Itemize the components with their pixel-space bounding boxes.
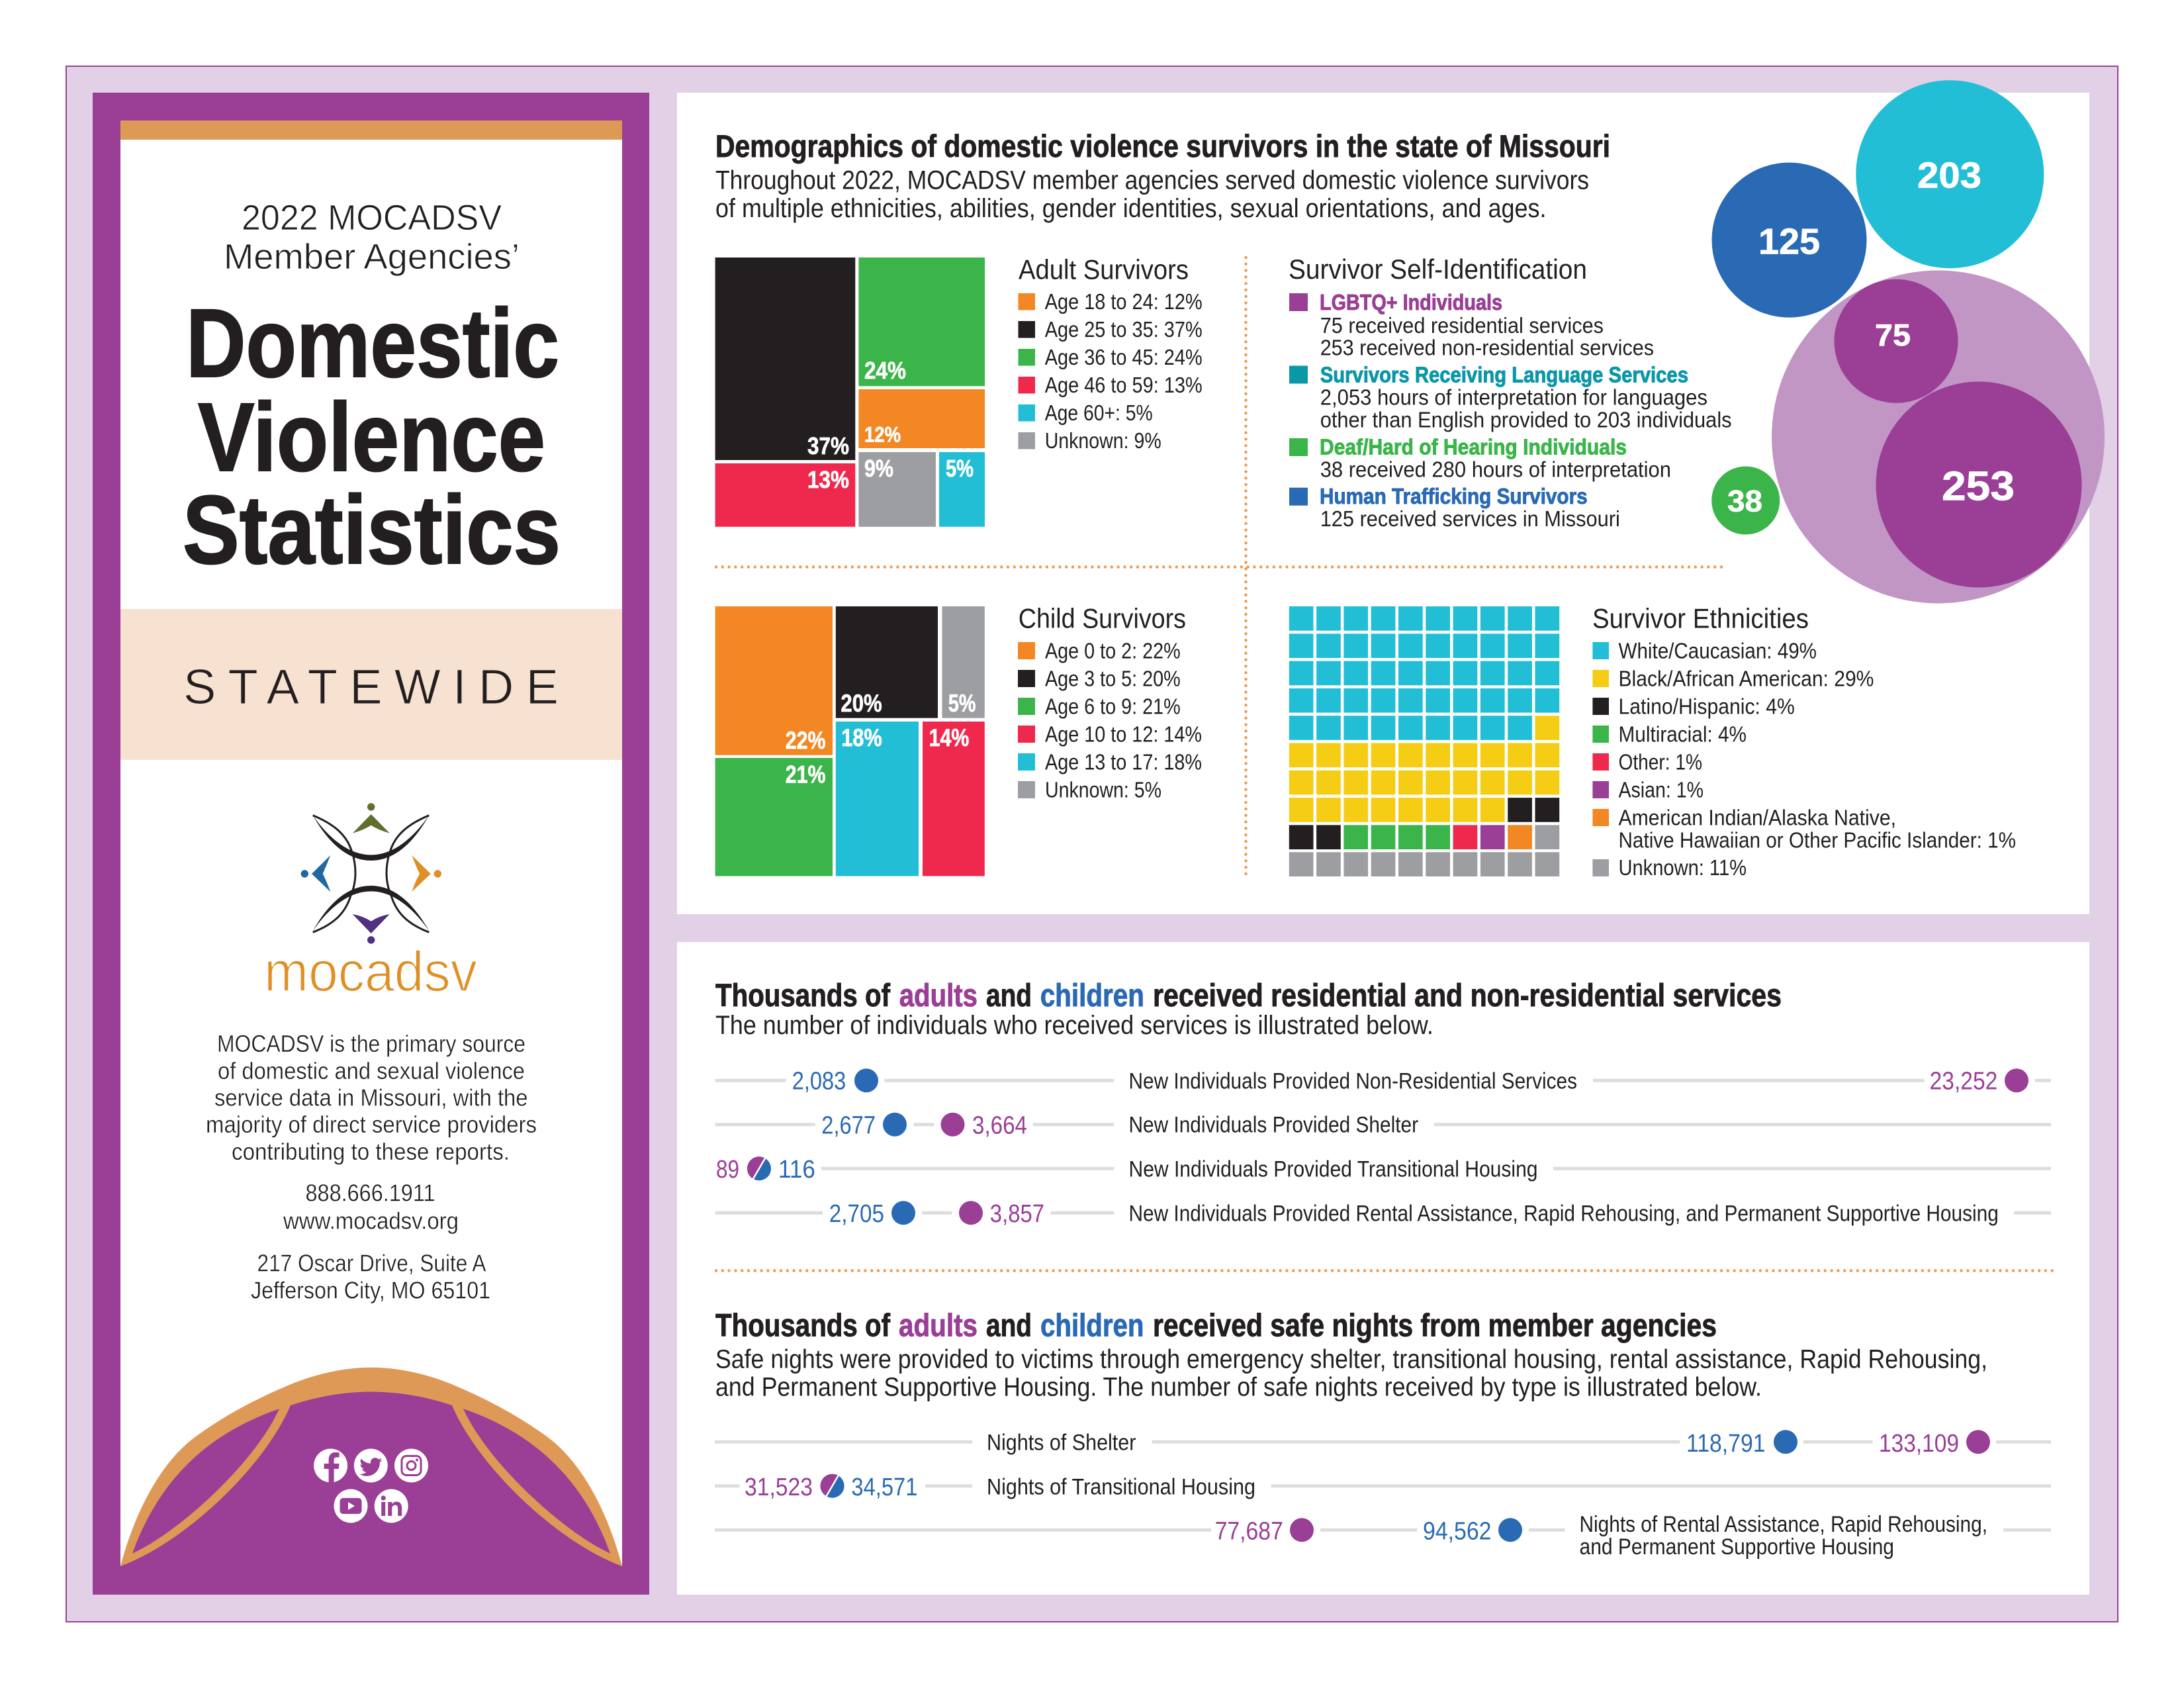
item: LGBTQ+: LGBTQ+ Individuals: [1320, 290, 1502, 314]
row: nights of transitional housing: [715, 1474, 2051, 1501]
row: nights of shelter: 133,109: [1879, 1430, 1959, 1458]
row: shelter: New Individuals Provided Shelter: [1129, 1113, 1418, 1138]
row: nights of transitional housing: Nights of Transitional Housing: [987, 1474, 1255, 1499]
title: Domestic: [186, 289, 559, 398]
bubble: 75: 75: [1875, 318, 1911, 352]
item: human trafficking: 125 received services in Missouri: [1320, 506, 1620, 531]
icon: split dot: [821, 1474, 844, 1498]
treemap: child survivors: [715, 606, 985, 876]
legend: child survivors: Unknown: 5%: [1045, 778, 1161, 802]
logo: mocadsv: [264, 803, 477, 1004]
self-identification: [1289, 254, 1732, 531]
item: deaf/hard of hearing: [1289, 435, 1671, 481]
item: language services: [1289, 363, 1732, 432]
bubble: 75: [1835, 279, 1958, 403]
logo: mocadsv: mocadsv: [264, 941, 477, 1004]
item: LGBTQ+: 75 received residential services: [1320, 313, 1604, 338]
row: nights of shelter: 118,791: [1686, 1430, 1766, 1458]
safe nights heading: received safe nights from member agencies: [1153, 1308, 1717, 1343]
icon: instagram: [394, 1448, 428, 1483]
row: shelter: [715, 1111, 2051, 1139]
safe nights heading: adults: [899, 1308, 978, 1343]
demographics intro: of multiple ethnicities, abilities, gender identities, sexual orientations, and ages.: [715, 194, 1546, 223]
safe nights heading: Thousands of: [715, 1308, 891, 1343]
treemap: child survivors: 20%: [841, 690, 882, 717]
row: nights of shelter: [715, 1430, 2051, 1458]
services heading: children: [1040, 978, 1144, 1013]
services heading: [715, 978, 1782, 1013]
treemap: adult survivors: 37%: [807, 432, 849, 459]
demographics intro: Throughout 2022, MOCADSV member agencies served domestic violence survivors: [715, 165, 1589, 195]
panel: left sidebar: [93, 93, 649, 1595]
legend: survivor ethnicities: Latino/Hispanic: 4%: [1619, 694, 1795, 719]
row: shelter: 3,664: [972, 1111, 1027, 1139]
contact text: [251, 1180, 490, 1304]
panel: demographics: [677, 93, 2089, 914]
title: [183, 289, 561, 585]
legend: adult survivors: Age 60+: 5%: [1045, 400, 1153, 425]
legend: adult survivors: Age 18 to 24: 12%: [1045, 289, 1203, 314]
services intro: The number of individuals who received services is illustrated below.: [715, 1011, 1433, 1040]
bubble: 253: 253: [1942, 464, 2015, 510]
item: deaf/hard of hearing: Deaf/Hard of Hearing Individuals: [1320, 435, 1627, 459]
legend: child survivors: Age 13 to 17: 18%: [1045, 750, 1202, 774]
row: transitional housing: New Individuals Provided Transitional Housing: [1129, 1156, 1538, 1182]
subtitle: Member Agencies’: [224, 237, 520, 277]
about text: contributing to these reports.: [232, 1138, 510, 1165]
subtitle: [224, 198, 520, 277]
bubble: 125: [1711, 163, 1866, 318]
about text: majority of direct service providers: [206, 1111, 537, 1138]
legend: survivor ethnicities: Survivor Ethnicities: [1592, 603, 1809, 634]
legend: adult survivors: Adult Survivors: [1019, 254, 1189, 285]
waffle chart: survivor ethnicities: [1289, 606, 1559, 876]
contact text: 217 Oscar Drive, Suite A: [257, 1250, 486, 1276]
demographics heading: Demographics of domestic violence survivors in the state of Missouri: [715, 128, 1610, 164]
legend: survivor ethnicities: Other: 1%: [1619, 750, 1702, 774]
bubble chart: [1711, 80, 2105, 604]
about text: service data in Missouri, with the: [214, 1084, 528, 1111]
item: language services: 2,053 hours of interpretation for languages: [1320, 385, 1707, 410]
row: transitional housing: [716, 1156, 2051, 1184]
about text: [206, 1030, 537, 1165]
bubble: 203: 203: [1917, 155, 1981, 196]
legend: adult survivors: Age 46 to 59: 13%: [1045, 373, 1203, 397]
bubble: 253: [1876, 381, 2082, 588]
icon: twitter: [354, 1448, 388, 1483]
statewide band: [120, 609, 622, 760]
row: non-residential services: [715, 1068, 2051, 1096]
row: nights of rental assistance: 77,687: [1215, 1518, 1283, 1546]
row: rental assistance: 2,705: [829, 1200, 884, 1228]
row: rental assistance: [715, 1200, 2051, 1228]
contact text: www.mocadsv.org: [283, 1207, 459, 1234]
panel: services: [677, 942, 2089, 1595]
row: non-residential services: 2,083: [792, 1068, 846, 1096]
title: Statistics: [183, 476, 561, 585]
legend: survivor ethnicities: [1592, 603, 2016, 880]
row: shelter: 2,677: [821, 1111, 876, 1139]
row: nights of rental assistance: and Permanent Supportive Housing: [1579, 1534, 1894, 1560]
row: transitional housing: 89: [716, 1156, 739, 1184]
item: LGBTQ+: 253 received non-residential services: [1320, 336, 1654, 360]
treemap: adult survivors: 13%: [807, 466, 849, 493]
icon: linkedin: [375, 1489, 408, 1523]
legend: child survivors: [1018, 603, 1202, 802]
item: language services: Survivors Receiving Language Services: [1320, 363, 1688, 387]
treemap: child survivors: 14%: [929, 724, 969, 751]
treemap: adult survivors: 24%: [864, 357, 906, 384]
icon: split dot: [747, 1156, 771, 1180]
safe nights intro: Safe nights were provided to victims through emergency shelter, transitional housing, rental assistance, Rapid Rehousing,: [715, 1345, 1987, 1374]
row: nights of transitional housing: 34,571: [851, 1474, 917, 1501]
services heading: adults: [899, 978, 978, 1013]
legend: survivor ethnicities: Native Hawaiian or Other Pacific Islander: 1%: [1619, 828, 2016, 853]
legend: survivor ethnicities: Multiracial: 4%: [1619, 722, 1747, 747]
self-identification: Survivor Self-Identification: [1289, 254, 1587, 285]
bubble: total LGBTQ+: [1772, 270, 2105, 604]
legend: survivor ethnicities: Black/African American: 29%: [1619, 667, 1874, 691]
row: nights of shelter: Nights of Shelter: [987, 1430, 1136, 1456]
safe nights intro: [715, 1345, 1987, 1402]
safe nights heading: [715, 1308, 1717, 1343]
row: non-residential services: 23,252: [1930, 1068, 1997, 1096]
legend: child survivors: Age 0 to 2: 22%: [1045, 639, 1181, 663]
contact text: Jefferson City, MO 65101: [251, 1276, 490, 1304]
safe nights heading: and: [986, 1308, 1032, 1343]
legend: adult survivors: Age 36 to 45: 24%: [1045, 345, 1203, 369]
item: deaf/hard of hearing: 38 received 280 hours of interpretation: [1320, 457, 1671, 481]
treemap: child survivors: 22%: [786, 727, 826, 754]
treemap: child survivors: 5%: [948, 690, 976, 717]
item: language services: other than English provided to 203 individuals: [1320, 407, 1732, 432]
row: rental assistance: 3,857: [990, 1200, 1044, 1228]
legend: adult survivors: Unknown: 9%: [1045, 428, 1161, 453]
bubble: 125: 125: [1758, 221, 1820, 262]
item: human trafficking: [1289, 484, 1620, 531]
item: human trafficking: Human Trafficking Survivors: [1320, 484, 1588, 508]
safe nights heading: children: [1040, 1308, 1144, 1343]
icon: facebook: [314, 1448, 347, 1483]
treemap: child survivors: 18%: [841, 724, 882, 751]
services heading: received residential and non-residential services: [1153, 978, 1782, 1013]
row: transitional housing: 116: [778, 1156, 815, 1184]
about text: of domestic and sexual violence: [218, 1057, 525, 1084]
legend: child survivors: Child Survivors: [1019, 603, 1186, 634]
bubble: 38: [1711, 466, 1780, 535]
contact text: 888.666.1911: [306, 1180, 435, 1206]
social icons: [314, 1448, 428, 1523]
legend: survivor ethnicities: White/Caucasian: 49%: [1619, 639, 1817, 663]
treemap: adult survivors: [715, 258, 985, 527]
treemap: adult survivors: 5%: [946, 455, 974, 482]
row: rental assistance: New Individuals Provided Rental Assistance, Rapid Rehousing, and Permanent Supportive Housing: [1129, 1201, 1999, 1226]
demographics intro: [715, 165, 1589, 223]
icon: youtube: [334, 1489, 368, 1523]
services heading: Thousands of: [715, 978, 891, 1013]
row: non-residential services: New Individuals Provided Non-Residential Services: [1129, 1068, 1577, 1094]
decorative dome: [120, 1368, 622, 1595]
bubble: 203: [1856, 80, 2044, 268]
treemap: adult survivors: 12%: [864, 422, 901, 446]
title: Violence: [198, 383, 545, 492]
services heading: and: [986, 978, 1032, 1013]
row: nights of transitional housing: 31,523: [745, 1474, 813, 1501]
legend: child survivors: Age 10 to 12: 14%: [1045, 722, 1202, 747]
row: nights of rental assistance: [715, 1512, 2051, 1560]
row: nights of rental assistance: 94,562: [1423, 1518, 1492, 1546]
treemap: child survivors: 21%: [786, 761, 826, 788]
item: LGBTQ+: [1289, 290, 1654, 360]
legend: adult survivors: [1018, 254, 1203, 453]
legend: child survivors: Age 3 to 5: 20%: [1045, 667, 1181, 691]
safe nights intro: and Permanent Supportive Housing. The number of safe nights received by type is illustrated below.: [715, 1373, 1762, 1402]
legend: survivor ethnicities: American Indian/Alaska Native,: [1619, 806, 1896, 830]
legend: survivor ethnicities: Asian: 1%: [1619, 778, 1704, 802]
row: nights of rental assistance: Nights of Rental Assistance, Rapid Rehousing,: [1579, 1512, 1987, 1537]
subtitle: 2022 MOCADSV: [242, 198, 502, 238]
bubble: 38: 38: [1727, 484, 1762, 518]
treemap: adult survivors: 9%: [864, 455, 893, 482]
legend: adult survivors: Age 25 to 35: 37%: [1045, 317, 1203, 342]
about text: MOCADSV is the primary source: [217, 1030, 525, 1057]
legend: survivor ethnicities: Unknown: 11%: [1619, 855, 1747, 880]
statewide band: STATEWIDE: [183, 659, 559, 714]
legend: child survivors: Age 6 to 9: 21%: [1045, 694, 1181, 719]
